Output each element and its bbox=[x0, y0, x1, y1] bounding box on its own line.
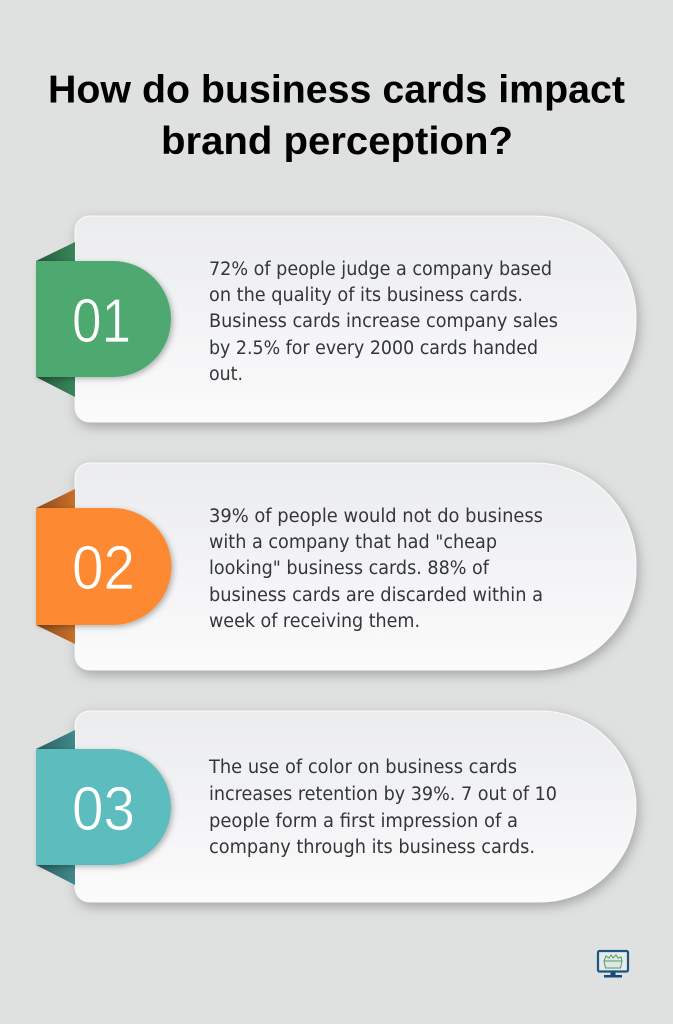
text 01: by 2.5% for every 2000 cards handed bbox=[209, 338, 538, 359]
text 01: Business cards increase company sales bbox=[209, 311, 558, 332]
text 01 bbox=[209, 259, 558, 385]
panel: step 03 bbox=[36, 711, 636, 902]
text 03: The use of color on business cards bbox=[208, 757, 517, 778]
text 02: looking" business cards. 88% of bbox=[209, 558, 490, 579]
title: brand perception? bbox=[161, 120, 513, 163]
text 02: 39% of people would not do business bbox=[209, 506, 543, 527]
text 02: week of receiving them. bbox=[209, 611, 420, 632]
text 03 bbox=[208, 757, 557, 858]
icon: computer monitor with toolbox bbox=[598, 951, 628, 978]
title bbox=[48, 68, 625, 163]
text 02: business cards are discarded within a bbox=[209, 585, 543, 606]
ribbon folds 02 bbox=[36, 489, 75, 644]
text 03: people form a first impression of a bbox=[209, 811, 518, 832]
number 03: 03 bbox=[72, 775, 135, 844]
badge 03 bbox=[36, 749, 171, 865]
ribbon folds 03 bbox=[36, 730, 75, 885]
badge 01 bbox=[36, 261, 171, 377]
text 03: increases retention by 39%. 7 out of 10 bbox=[209, 784, 557, 805]
panel: step 01 bbox=[36, 216, 636, 422]
panel: step 02 bbox=[36, 463, 636, 670]
number 01: 01 bbox=[72, 287, 131, 356]
card 01 bbox=[75, 216, 636, 422]
text 02: with a company that had "cheap bbox=[209, 532, 497, 553]
title: How do business cards impact bbox=[48, 68, 625, 112]
text 01: out. bbox=[209, 364, 243, 385]
text 02 bbox=[209, 506, 543, 632]
text 01: 72% of people judge a company based bbox=[209, 259, 552, 280]
text 03: company through its business cards. bbox=[209, 837, 535, 858]
text 01: on the quality of its business cards. bbox=[209, 285, 523, 306]
ribbon folds 01 bbox=[36, 242, 75, 397]
card 03 bbox=[75, 711, 636, 902]
badge 02 bbox=[36, 508, 172, 625]
number 02: 02 bbox=[72, 534, 135, 603]
card 02 bbox=[75, 463, 636, 670]
